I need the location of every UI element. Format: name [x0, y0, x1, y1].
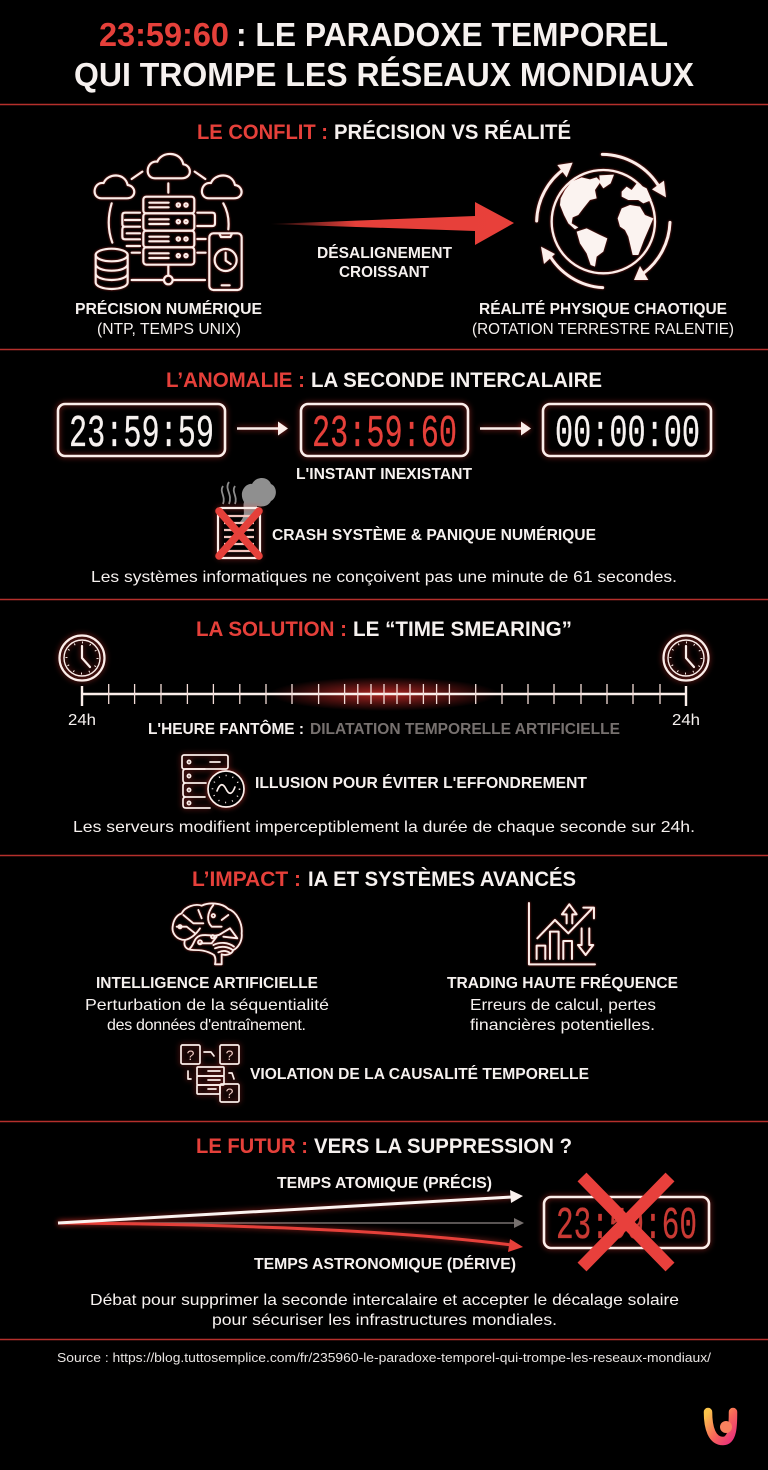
text: future explanation: Débat pour supprimer la seconde intercalaire et accepter le décalage solaire	[90, 1292, 679, 1309]
caption: high-frequency trading: financières potentielles.	[470, 1017, 655, 1034]
label: left 24h: 24h	[68, 712, 96, 729]
source: Source : https://blog.tuttosemplice.com/fr/235960-le-paradoxe-temporel-qui-trompe-les-reseaux-mondiaux/	[57, 1350, 711, 1365]
heading: l'anomalie	[166, 369, 602, 392]
caption: numeric precision: (NTP, TEMPS UNIX)	[97, 321, 241, 338]
caption: high-frequency trading: Erreurs de calcul, pertes	[470, 997, 656, 1014]
caption: physical reality: (ROTATION TERRESTRE RALENTIE)	[472, 321, 734, 338]
icon: crashed server	[218, 478, 276, 558]
heading: le futur: LE FUTUR :	[196, 1135, 308, 1158]
icon: logo	[708, 1412, 733, 1441]
panel: le conflit	[75, 121, 734, 338]
caption: physical reality: RÉALITÉ PHYSIQUE CHAOTIQUE	[479, 301, 727, 318]
heading: la solution: LA SOLUTION :	[196, 618, 347, 641]
clock: 23:59:59	[58, 404, 225, 460]
crossed-out clock	[544, 1177, 709, 1267]
icon: causality violation: ?	[187, 1047, 195, 1063]
text: future explanation: pour sécuriser les infrastructures mondiales.	[212, 1312, 557, 1329]
timeline	[82, 677, 686, 711]
label: phantom hour: L'HEURE FANTÔME :	[148, 720, 304, 738]
icon: left clock	[60, 636, 104, 680]
clock: 23:59:60	[301, 404, 468, 460]
label: crash: CRASH SYSTÈME & PANIQUE NUMÉRIQUE	[272, 527, 596, 544]
title: 23:59:60	[99, 16, 229, 53]
caption: high-frequency trading	[447, 975, 678, 1034]
text: anomaly explanation: Les systèmes informatiques ne conçoivent pas une minute de 61 secondes.	[91, 569, 677, 586]
title: : LE PARADOXE TEMPOREL	[236, 16, 668, 53]
heading: l'impact: L’IMPACT :	[192, 868, 301, 891]
icon: causality violation	[181, 1045, 239, 1102]
caption: high-frequency trading: TRADING HAUTE FRÉQUENCE	[447, 975, 678, 992]
icon: causality violation: ?	[226, 1085, 234, 1101]
icon: right clock	[664, 636, 708, 680]
panel: l'anomalie	[58, 369, 711, 586]
title	[74, 16, 694, 93]
label: nonexistent instant: L'INSTANT INEXISTANT	[296, 466, 473, 483]
heading: l'anomalie: LA SECONDE INTERCALAIRE	[311, 369, 602, 392]
label: right 24h: 24h	[672, 712, 700, 729]
label: phantom hour	[148, 720, 620, 738]
icon: server with clock	[182, 755, 244, 808]
title: QUI TROMPE LES RÉSEAUX MONDIAUX	[74, 56, 694, 93]
caption: artificial intelligence: des données d'entraînement.	[107, 1017, 306, 1034]
heading: l'impact	[192, 868, 576, 891]
label: atomic time: TEMPS ATOMIQUE (PRÉCIS)	[277, 1175, 492, 1192]
caption: artificial intelligence: Perturbation de la séquentialité	[85, 997, 329, 1014]
heading: le conflit	[197, 121, 571, 144]
heading: le futur: VERS LA SUPPRESSION ?	[314, 1135, 572, 1158]
clock: 23:59:59: 23:59:59	[69, 409, 214, 460]
panel: la solution	[60, 618, 708, 836]
label: misalignment: CROISSANT	[339, 264, 430, 281]
text: solution explanation: Les serveurs modifient imperceptiblement la durée de chaque seconde sur 24h.	[73, 819, 695, 836]
icon: trading chart	[529, 903, 595, 964]
crossed-out clock: 23:59:60	[556, 1201, 697, 1252]
clock: 00:00:00: 00:00:00	[555, 409, 700, 460]
heading: l'anomalie: L’ANOMALIE :	[166, 369, 305, 392]
heading: la solution	[196, 618, 572, 641]
icon: rotating globe	[537, 154, 670, 288]
caption: numeric precision: PRÉCISION NUMÉRIQUE	[75, 301, 262, 318]
caption: physical reality	[472, 301, 734, 338]
heading: l'impact: IA ET SYSTÈMES AVANCÉS	[308, 868, 576, 891]
arrow: growing misalignment	[270, 202, 514, 245]
caption: artificial intelligence: INTELLIGENCE ARTIFICIELLE	[96, 975, 318, 992]
icon: brain	[173, 903, 242, 964]
arrow	[480, 422, 531, 436]
icon: server network	[95, 154, 242, 290]
heading: le conflit: LE CONFLIT :	[197, 121, 328, 144]
icon: causality violation: ?	[226, 1047, 234, 1063]
caption: numeric precision	[75, 301, 262, 338]
label: causality violation: VIOLATION DE LA CAUSALITÉ TEMPORELLE	[250, 1066, 589, 1083]
label: phantom hour: DILATATION TEMPORELLE ARTIFICIELLE	[310, 721, 620, 738]
panel: le futur	[58, 1135, 709, 1329]
text: future explanation	[90, 1292, 679, 1329]
label: misalignment: DÉSALIGNEMENT	[317, 245, 453, 262]
heading: le futur	[196, 1135, 572, 1158]
arrow	[237, 422, 288, 436]
label: astronomical time: TEMPS ASTRONOMIQUE (DÉRIVE)	[254, 1256, 516, 1273]
clock: 00:00:00	[543, 404, 711, 460]
heading: la solution: LE “TIME SMEARING”	[353, 618, 572, 641]
caption: artificial intelligence	[85, 975, 329, 1034]
chart: diverging time arrows	[58, 1190, 524, 1252]
clock: 23:59:60: 23:59:60	[312, 409, 457, 460]
panel: l'impact	[85, 868, 678, 1102]
label: misalignment	[317, 245, 453, 281]
label: illusion: ILLUSION POUR ÉVITER L'EFFONDREMENT	[255, 775, 588, 792]
heading: le conflit: PRÉCISION VS RÉALITÉ	[334, 121, 571, 144]
